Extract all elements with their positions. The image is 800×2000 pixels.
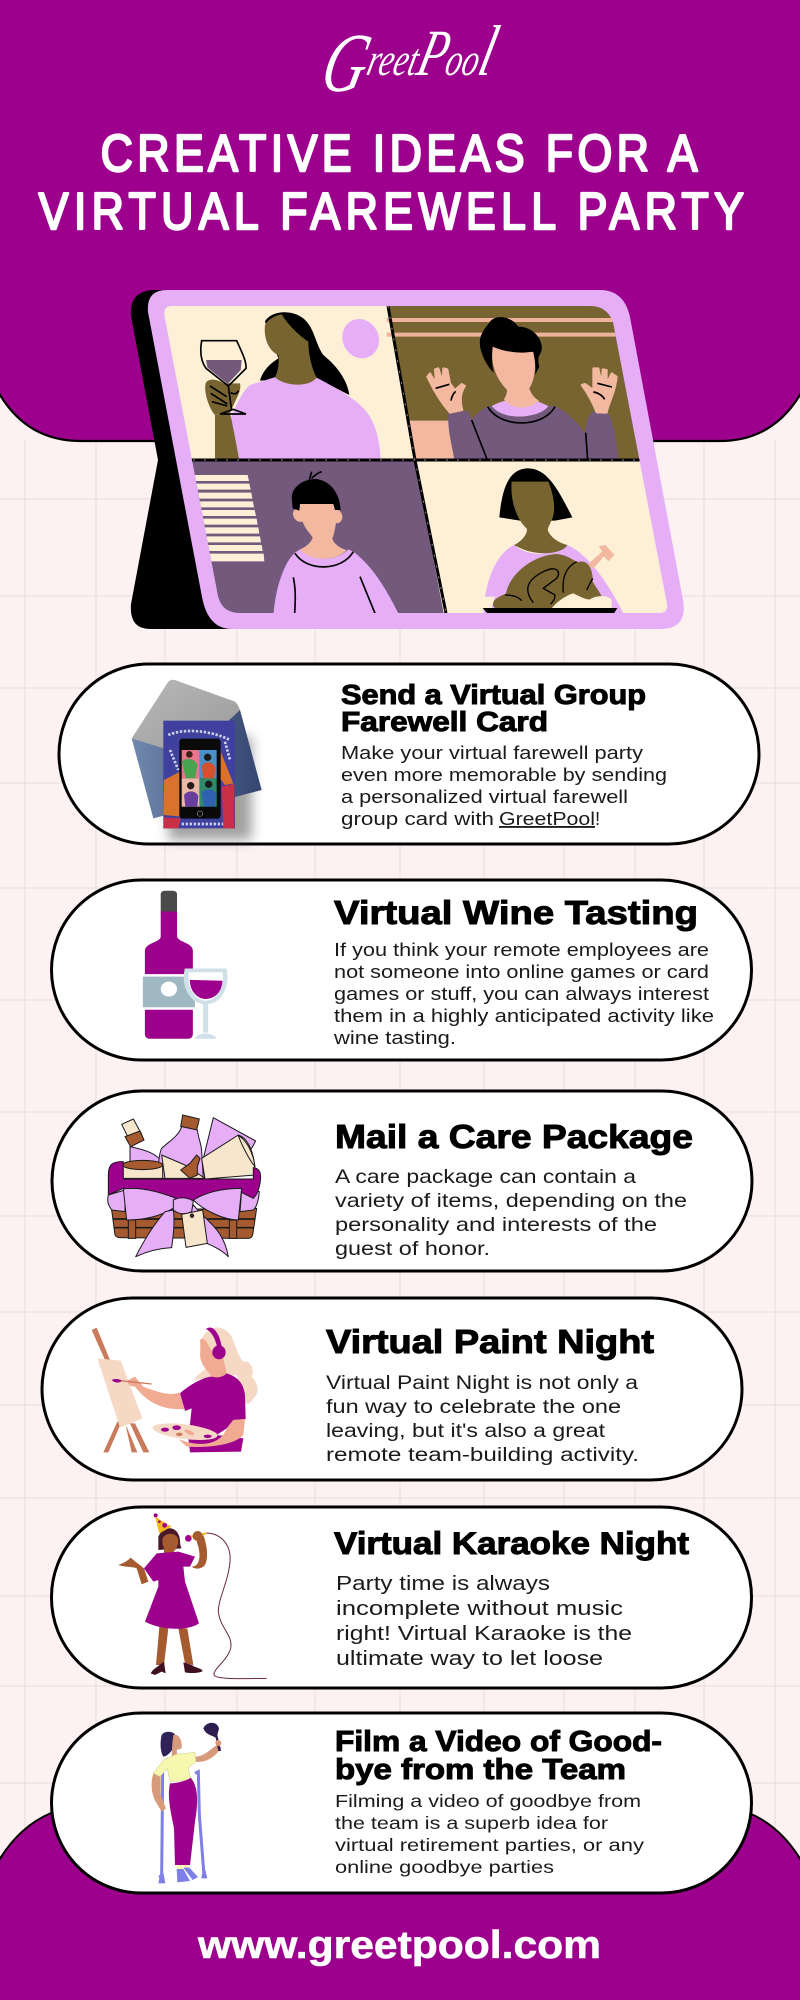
- caller: woman with wine: [201, 312, 385, 460]
- body text: [333, 939, 714, 1048]
- pill shape: [52, 1091, 752, 1271]
- pill shape: [52, 880, 752, 1060]
- body text: ultimate way to let loose: [336, 1648, 603, 1670]
- title: VIRTUAL FAREWELL PARTY: [39, 183, 744, 241]
- panel: mail a care package: [52, 1091, 752, 1271]
- caller: man with stripes: [194, 472, 400, 617]
- title: [39, 125, 744, 241]
- body text: remote team-building activity.: [326, 1445, 639, 1466]
- logo: GreetPool: reet: [362, 35, 425, 86]
- tablet stand: [131, 290, 240, 629]
- icon: woman painting: [92, 1327, 257, 1452]
- body text: GreetPool: [499, 808, 595, 829]
- heading: Virtual Paint Night: [326, 1323, 654, 1360]
- body text: the team is a superb idea for: [335, 1813, 608, 1833]
- logo: GreetPool: Pool: [411, 11, 512, 91]
- body text: [336, 1573, 632, 1670]
- icon: greeting card with envelope: [132, 680, 262, 840]
- body text: [326, 1373, 639, 1466]
- heading: Virtual Karaoke Night: [334, 1525, 690, 1561]
- body text: fun way to celebrate the one: [326, 1397, 621, 1418]
- body text: !: [595, 808, 600, 829]
- icon: woman singing karaoke: [118, 1513, 267, 1679]
- body text: even more memorable by sending: [341, 764, 667, 785]
- heading: Farewell Card: [341, 706, 548, 737]
- body text: If you think your remote employees are: [334, 939, 709, 960]
- body text: online goodbye parties: [335, 1857, 554, 1877]
- logo: GreetPool: G: [313, 17, 379, 110]
- heading: Film a Video of Good-: [335, 1726, 662, 1758]
- pill shape: [59, 664, 759, 844]
- body text: games or stuff, you can always interest: [334, 983, 709, 1004]
- body text: Virtual Paint Night is not only a: [326, 1373, 639, 1394]
- body text: wine tasting.: [333, 1027, 456, 1048]
- body text: leaving, but it's also a great: [326, 1421, 606, 1442]
- body text: a personalized virtual farewell: [341, 786, 628, 807]
- body text: virtual retirement parties, or any: [335, 1835, 644, 1855]
- heading: Send a Virtual Group: [341, 679, 646, 710]
- caller: waving woman: [387, 317, 618, 460]
- footer url: www.greetpool.com: [197, 1924, 601, 1967]
- panel: virtual group farewell card: [59, 664, 759, 844]
- footer band: [0, 1790, 800, 2000]
- tablet screen: [164, 306, 668, 613]
- heading: [335, 1726, 662, 1786]
- body text: incomplete without music: [336, 1598, 623, 1620]
- heading: Virtual Wine Tasting: [334, 895, 698, 932]
- icon: gift basket: [108, 1115, 261, 1257]
- illustration: tablet video call: [131, 290, 690, 629]
- body text: right! Virtual Karaoke is the: [336, 1623, 632, 1645]
- body text: guest of honor.: [335, 1238, 490, 1260]
- body text: [335, 1166, 687, 1260]
- body text: Filming a video of goodbye from: [335, 1791, 641, 1811]
- pill shape: [42, 1298, 742, 1480]
- body text: [335, 1791, 644, 1877]
- panel: virtual karaoke night: [52, 1507, 752, 1688]
- heading: bye from the Team: [335, 1754, 626, 1786]
- body text: Party time is always: [336, 1573, 550, 1595]
- panel: film a video of good-bye: [52, 1713, 752, 1893]
- screen dividers: [192, 306, 640, 613]
- body text: [341, 742, 667, 829]
- panel: virtual wine tasting: [52, 880, 752, 1060]
- icon: wine bottle and glass: [143, 891, 225, 1039]
- tablet frame: [148, 290, 684, 629]
- body text: group card with: [341, 808, 494, 829]
- body text: variety of items, depending on the: [335, 1190, 687, 1212]
- body text: personality and interests of the: [335, 1214, 657, 1236]
- pill shape: [52, 1713, 752, 1893]
- body text: Make your virtual farewell party: [341, 742, 644, 763]
- body text: A care package can contain a: [335, 1166, 636, 1188]
- heading: [341, 679, 646, 737]
- heading: Mail a Care Package: [335, 1119, 693, 1156]
- caller: woman with turkey: [483, 468, 623, 613]
- header band: [0, 0, 800, 441]
- body text: them in a highly anticipated activity like: [334, 1005, 714, 1026]
- pill shape: [52, 1507, 752, 1688]
- title: CREATIVE IDEAS FOR A: [101, 125, 698, 183]
- panel: virtual paint night: [42, 1298, 742, 1480]
- body text: not someone into online games or card: [334, 961, 709, 982]
- icon: woman on crutches filming: [152, 1723, 222, 1883]
